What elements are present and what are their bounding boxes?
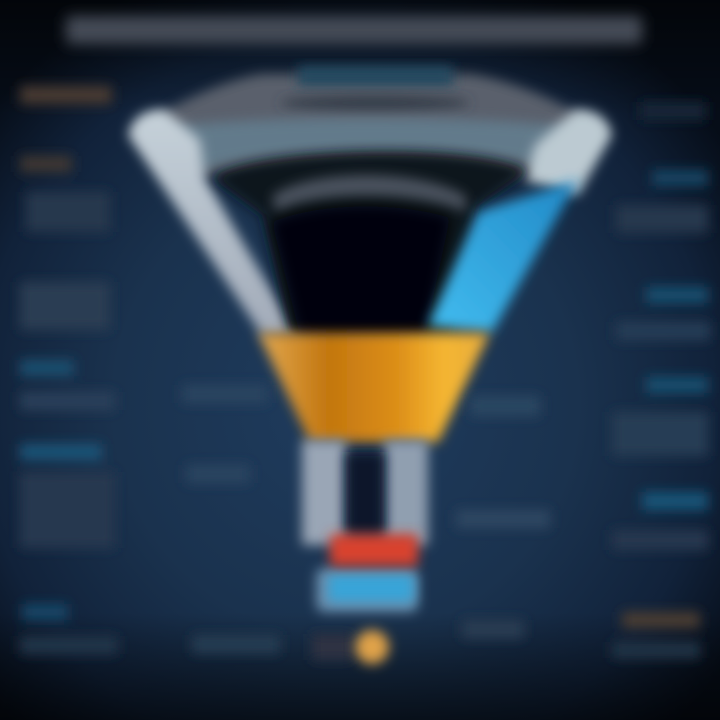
centre right label 1: [470, 396, 540, 416]
orange drop shadow: [312, 634, 352, 660]
left label heading 1: [20, 86, 112, 104]
funnel dark interior: [212, 152, 528, 335]
left label text 4: [20, 392, 115, 410]
right label text 5: [612, 530, 708, 550]
funnel left wall: [128, 110, 298, 335]
funnel blue panel: [428, 180, 578, 332]
centre right label 3: [462, 620, 524, 638]
left labels: [20, 86, 118, 654]
funnel right corner: [525, 110, 612, 195]
tube left wall: [302, 440, 346, 545]
centre left label 1: [182, 385, 268, 403]
tube right wall: [384, 440, 428, 545]
right label text 6: [612, 642, 700, 658]
funnel throat: [272, 206, 450, 335]
right label text 1: [640, 102, 706, 120]
centre left label 3: [192, 635, 280, 653]
right labels: [612, 102, 710, 658]
centre left label 2: [186, 465, 250, 483]
centre labels: [182, 385, 550, 653]
right label text 4: [612, 412, 708, 456]
left label heading 4: [20, 360, 74, 376]
left label text 3: [20, 282, 110, 330]
funnel rim inner shadow: [280, 95, 470, 111]
funnel front band: [150, 118, 590, 175]
funnel orange section: [258, 333, 490, 442]
tube gray base sides: [316, 568, 418, 612]
left label heading 2: [20, 156, 72, 172]
tube dark centre: [346, 452, 384, 534]
title: [66, 16, 642, 44]
left label heading 6: [22, 604, 68, 620]
right label heading 4: [646, 377, 708, 393]
funnel back rim: [135, 74, 605, 175]
funnel inner gray arc: [272, 175, 466, 212]
tube blue band: [328, 574, 414, 602]
orange drop: [355, 630, 389, 664]
right label heading 3: [646, 287, 708, 303]
right label heading 2: [652, 170, 708, 186]
funnel rim teal highlight: [298, 66, 453, 86]
right label text 3: [616, 322, 710, 340]
right label heading 6: [622, 612, 700, 628]
funnel: [128, 66, 612, 664]
left label text 5: [20, 472, 115, 548]
centre right label 2: [456, 510, 550, 528]
tube red band: [330, 534, 418, 566]
left label text 2: [26, 192, 110, 232]
right label text 2: [616, 205, 708, 233]
left label text 6: [20, 636, 118, 654]
left label heading 5: [20, 444, 102, 460]
right label heading 5: [642, 492, 708, 510]
